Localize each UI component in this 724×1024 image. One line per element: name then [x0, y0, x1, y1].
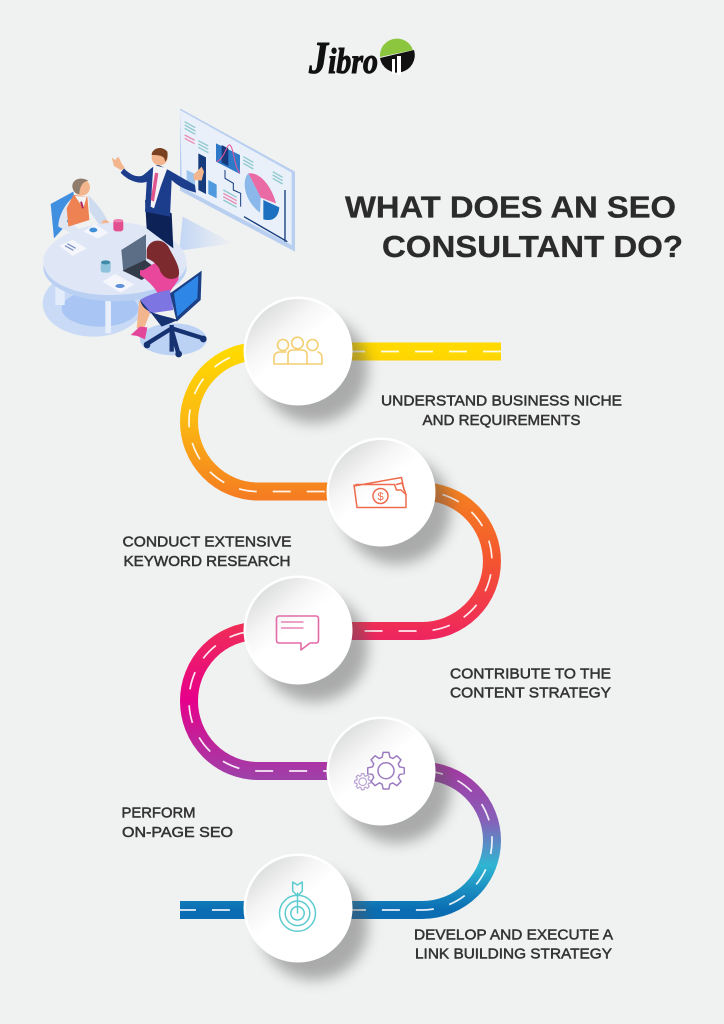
office chair — [140, 271, 207, 357]
round table — [43, 233, 187, 301]
step 5 label: DEVELOP AND EXECUTE A — [414, 926, 614, 943]
step 1: circle and people icon — [244, 296, 368, 423]
step 3 label — [450, 666, 611, 702]
step 5 label — [414, 926, 614, 962]
icon: banknotes: $ — [377, 491, 384, 503]
step 2 label — [122, 534, 292, 570]
title: WHAT DOES AN SEO — [345, 190, 676, 224]
step 4 label: PERFORM — [122, 804, 196, 822]
title — [345, 190, 683, 264]
illustration: SEO team meeting — [43, 108, 295, 357]
step 4 label — [122, 804, 233, 841]
title: CONSULTANT DO? — [382, 229, 683, 264]
step 2 label: KEYWORD RESEARCH — [124, 553, 290, 570]
icon: target with arrow — [280, 882, 316, 931]
logo: Jibro: Jibro — [308, 32, 378, 83]
step 1 label: UNDERSTAND BUSINESS NICHE — [381, 392, 622, 410]
table papers and mugs — [59, 219, 134, 293]
step 4: circle and gears icon — [326, 716, 451, 843]
presenter — [112, 148, 204, 248]
icon: people — [274, 337, 322, 364]
winding road — [180, 352, 501, 910]
step 1 label: AND REQUIREMENTS — [422, 412, 580, 429]
left chair — [51, 192, 77, 238]
step 2: circle and money icon — [326, 438, 451, 564]
step 2 label: CONDUCT EXTENSIVE — [122, 534, 292, 550]
step 3 label: CONTENT STRATEGY — [450, 684, 611, 702]
step 5: circle and target icon — [244, 854, 368, 980]
step 3: circle and chat icon — [244, 576, 368, 702]
step 4 label: ON-PAGE SEO — [122, 824, 233, 841]
table legs — [55, 287, 65, 305]
seated man — [58, 179, 109, 236]
icon: speech bubble — [276, 616, 318, 650]
icon: gears — [355, 752, 404, 790]
floor light beam — [179, 217, 233, 251]
floor shadows — [43, 270, 144, 337]
step 1 label — [381, 392, 622, 429]
seated woman — [121, 234, 179, 339]
step 5 label: LINK BUILDING STRATEGY — [415, 946, 612, 962]
step 3 label: CONTRIBUTE TO THE — [450, 666, 611, 682]
presentation board — [180, 108, 295, 252]
